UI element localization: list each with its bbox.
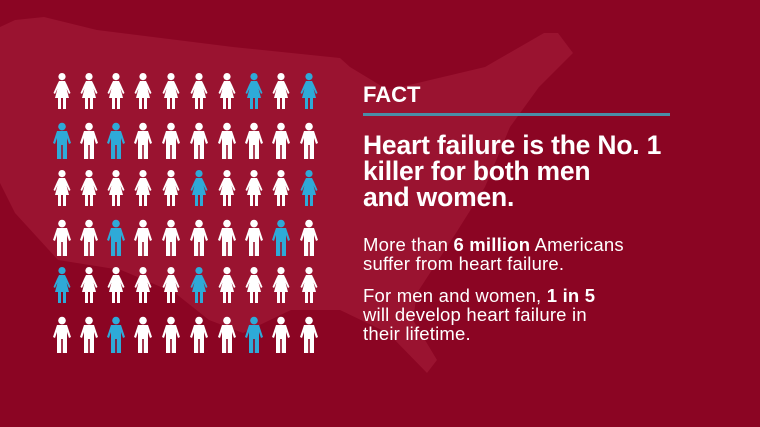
text: 1 in 5: For men and women, 1 in 5 — [363, 285, 595, 306]
text: 1 in 5: will develop heart failure in — [363, 304, 587, 325]
headline — [363, 130, 661, 212]
row 2 men — [53, 123, 318, 159]
headline: Heart failure is the No. 1 — [363, 130, 661, 160]
row 6 men — [53, 317, 318, 353]
text: 6 million: suffer from heart failure. — [363, 253, 564, 274]
headline: and women. — [363, 182, 514, 212]
pictogram grid of men and women — [53, 73, 318, 353]
headline: killer for both men — [363, 156, 590, 186]
divider line — [363, 113, 670, 116]
row 3 women — [54, 170, 318, 206]
row 4 men — [53, 220, 318, 256]
row 1 women — [54, 73, 318, 109]
heading: FACT: FACT — [363, 82, 420, 107]
text: 1 in 5 — [363, 285, 595, 344]
row 5 women — [54, 267, 318, 303]
text: 6 million — [363, 234, 624, 274]
text: 6 million: More than 6 million Americans — [363, 234, 624, 255]
text: 1 in 5: their lifetime. — [363, 323, 471, 344]
